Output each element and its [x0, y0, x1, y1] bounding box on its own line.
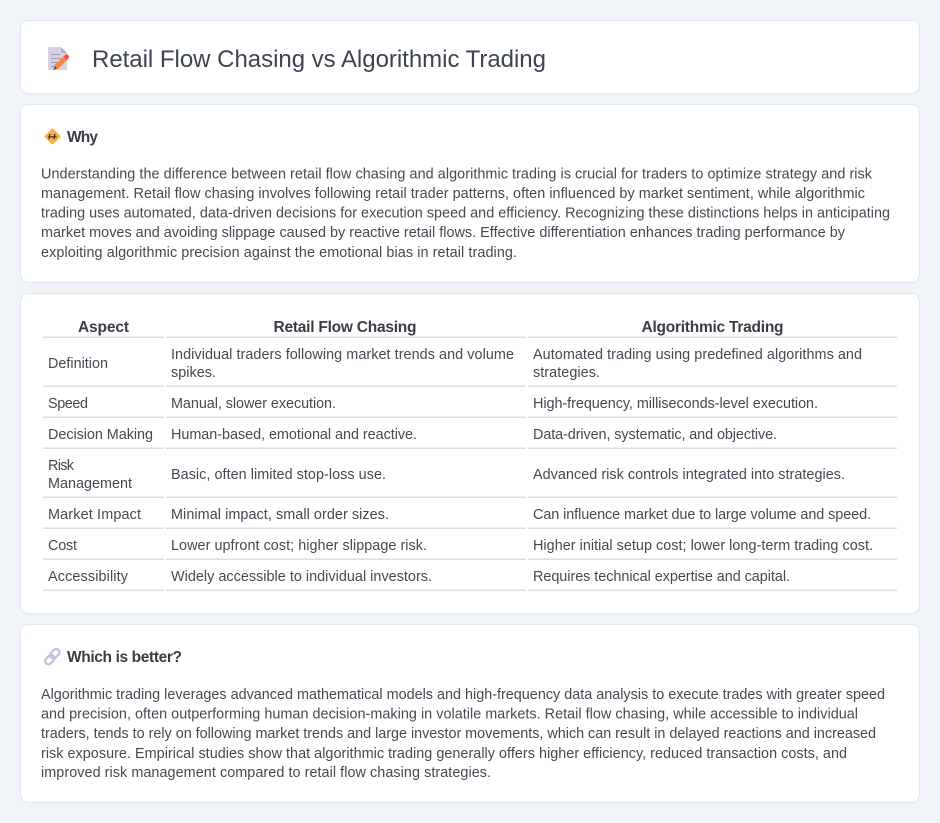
- row: risk management: Risk: [48, 458, 75, 474]
- icon: memo with pencil: [48, 47, 69, 70]
- row: decision making: Data-driven, systematic, and objective.: [533, 427, 777, 443]
- text block: why paragraph: Understanding the difference between retail flow chasing and algorithmic trading is crucial for traders to optimize strategy and risk: [41, 166, 873, 182]
- text block: why paragraph: management. Retail flow chasing involves following retail trader patterns, often influenced by market sentiment, while algorithmic: [41, 186, 865, 202]
- row: accessibility: Widely accessible to individual investors.: [171, 569, 432, 585]
- row: cost: Higher initial setup cost; lower long-term trading cost.: [533, 538, 873, 554]
- text block: which is better paragraph: traders, tends to rely on following market trends and large investor movements, which can result in delayed reactions and increased: [41, 726, 876, 742]
- row: risk management: [43, 458, 897, 498]
- panel: why: [20, 104, 920, 282]
- icon: link: [44, 648, 61, 666]
- row: definition: Automated trading using predefined algorithms and: [533, 347, 862, 363]
- row: definition: spikes.: [171, 365, 216, 381]
- row: speed: Speed: [48, 396, 88, 412]
- text block: which is better paragraph: [41, 687, 885, 781]
- row: definition: Definition: [48, 356, 108, 372]
- row: cost: Lower upfront cost; higher slippage risk.: [171, 538, 427, 554]
- text block: which is better paragraph: Algorithmic trading leverages advanced mathematical models and high-frequency data analysis to execute trades with greater speed: [41, 687, 885, 703]
- row: decision making: Human-based, emotional and reactive.: [171, 427, 417, 443]
- row: market impact: Market Impact: [48, 507, 141, 523]
- table header row: Aspect: [78, 319, 129, 336]
- row: speed: [43, 396, 897, 418]
- row: cost: Cost: [48, 538, 77, 554]
- heading: which is better: Which is better?: [67, 649, 182, 666]
- text block: why paragraph: trading uses automated, data-driven decisions for execution speed and efficiency. Recognizing these distinctions helps in anticipating: [41, 206, 890, 222]
- row: risk management: Basic, often limited stop-loss use.: [171, 467, 386, 483]
- row: speed: High-frequency, milliseconds-level execution.: [533, 396, 818, 412]
- text block: why paragraph: exploiting algorithmic precision against the emotional bias in retail trading.: [41, 245, 517, 261]
- row: definition: strategies.: [533, 365, 600, 381]
- row: definition: Individual traders following market trends and volume: [171, 347, 514, 363]
- title: Retail Flow Chasing vs Algorithmic Trading: [92, 46, 546, 73]
- row: market impact: Can influence market due to large volume and speed.: [533, 507, 871, 523]
- table header row: Algorithmic Trading: [642, 319, 784, 336]
- panel: which is better: [20, 624, 920, 802]
- row: risk management: Advanced risk controls integrated into strategies.: [533, 467, 845, 483]
- row: speed: Manual, slower execution.: [171, 396, 336, 412]
- row: decision making: Decision Making: [48, 427, 153, 443]
- table header row: Retail Flow Chasing: [274, 319, 416, 336]
- row: market impact: [43, 507, 897, 529]
- text block: why paragraph: [41, 166, 890, 261]
- text block: why paragraph: market moves and avoiding slippage caused by reactive retail flows. Effective differentiation enhances trading performance by: [41, 225, 846, 241]
- row: market impact: Minimal impact, small order sizes.: [171, 507, 389, 523]
- text block: which is better paragraph: and precision, often outperforming human decision-making in volatile markets. Retail flow chasing, while accessible to individual: [41, 706, 858, 722]
- row: accessibility: [43, 569, 897, 591]
- row: cost: [43, 538, 897, 560]
- text block: which is better paragraph: risk exposure. Empirical studies show that algorithmic trading generally offers higher efficiency, reduced transaction costs, and: [41, 746, 847, 762]
- panel: title header: [20, 20, 920, 94]
- row: accessibility: Accessibility: [48, 569, 129, 585]
- table header row: [43, 319, 897, 338]
- text block: which is better paragraph: improved risk management compared to retail flow chasing strategies.: [41, 765, 491, 781]
- row: decision making: [43, 427, 897, 449]
- row: risk management: Management: [48, 476, 132, 492]
- icon: construction diamond: [44, 128, 61, 145]
- heading: why: Why: [67, 129, 98, 146]
- panel: comparison table: [20, 294, 920, 614]
- row: accessibility: Requires technical expertise and capital.: [533, 569, 790, 585]
- row: definition: [43, 347, 897, 387]
